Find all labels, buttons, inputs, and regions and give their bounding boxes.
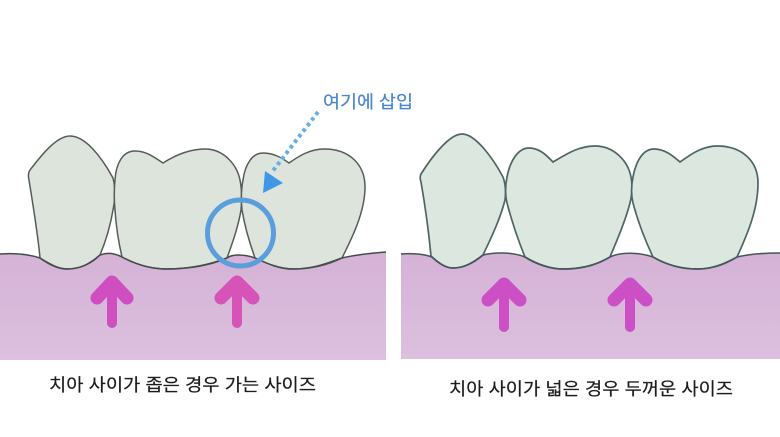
- panel: narrow gap, left diagram: [0, 92, 413, 395]
- arrow: left gum 2: [221, 282, 253, 323]
- gum: right: [401, 253, 780, 359]
- gum line: left: [0, 252, 386, 269]
- panel: wide gap, right diagram: [401, 134, 780, 399]
- arrow: right gum 1: [488, 284, 520, 327]
- tooth: left 1: [28, 136, 115, 269]
- tooth: left 2: [114, 149, 242, 269]
- arrow: left gum 1: [97, 282, 127, 323]
- tooth: right 2: [506, 146, 632, 269]
- tooth: left 3: [241, 149, 365, 269]
- label: insert here: 여기에 삽입: [323, 92, 413, 112]
- arrow: right gum 2: [614, 284, 646, 327]
- arrow head: [263, 171, 283, 193]
- dotted pointer arrow: [263, 112, 318, 193]
- gum: left: [0, 252, 386, 360]
- tooth: right 1: [420, 134, 506, 268]
- caption: right: 치아 사이가 넓은 경우 두꺼운 사이즈: [449, 379, 733, 399]
- gum line: right: [401, 253, 780, 269]
- caption: left: 치아 사이가 좁은 경우 가는 사이즈: [49, 375, 316, 395]
- tooth: right 3: [632, 146, 758, 269]
- highlight circle: [208, 200, 274, 266]
